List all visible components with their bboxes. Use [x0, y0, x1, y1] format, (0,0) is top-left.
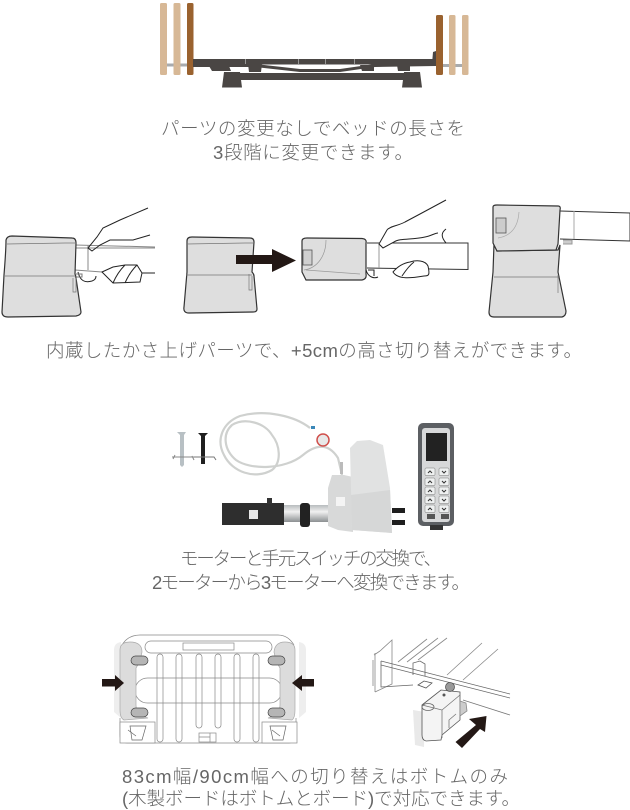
arrow: right side pointing left [292, 675, 314, 691]
text: width caption: (木製ボードはボトムとボード)で対応できます。 [122, 788, 520, 809]
text: motor caption: モーターと手元スイッチの交換で、 [180, 548, 442, 569]
text: bed length caption [161, 118, 465, 163]
bed length illustration [160, 3, 468, 88]
arrow: right [236, 249, 296, 272]
bed frame joint detail [373, 638, 510, 748]
arrow: left side pointing right [102, 675, 124, 691]
icon: two pins [172, 432, 216, 467]
before state with arrow [184, 237, 296, 313]
height switch: pulled out state [302, 200, 468, 280]
text: motor caption: 2モーターから3モーターへ変換できます。 [152, 572, 470, 593]
text: bed length caption: 3段階に変更できます。 [213, 142, 413, 163]
height switch illustration: pulling out part [2, 208, 155, 317]
text: bed length caption: パーツの変更なしでベッドの長さを [161, 118, 465, 139]
text: width caption: 83cm幅/90cm幅への切り替えはボトムのみ [122, 766, 508, 787]
height switch: raised state [489, 205, 630, 317]
bottom board plan view [102, 635, 314, 743]
remote control [418, 423, 454, 530]
text: width caption [122, 766, 520, 809]
text: height caption: 内蔵したかさ上げパーツで、+5cmの高さ切り替えができます。 [46, 340, 582, 361]
motor unit with cable [221, 413, 405, 533]
text: motor caption [152, 548, 470, 593]
arrow: diagonal up right [456, 716, 486, 748]
